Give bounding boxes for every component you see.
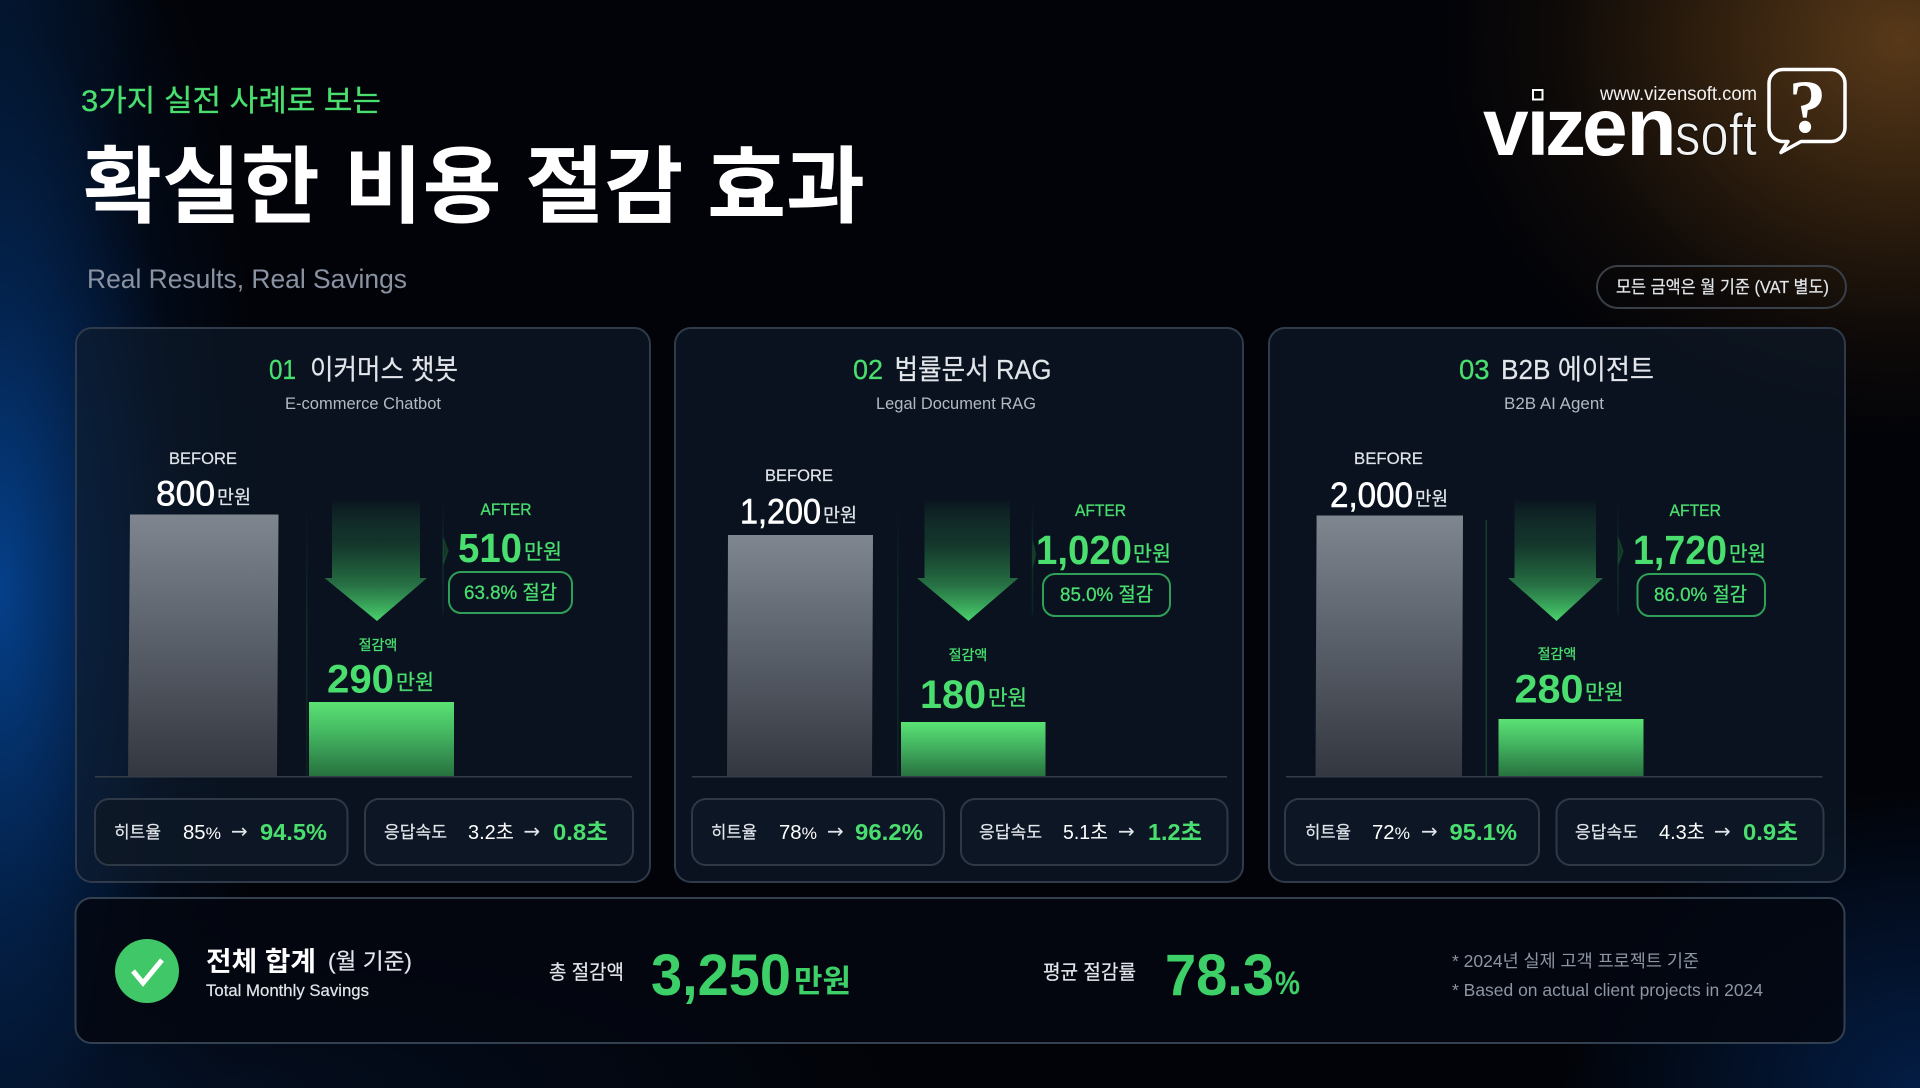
after value 03: 1,720 — [1633, 527, 1727, 573]
logo: vizensoft: www.vizensoft.com — [1599, 83, 1757, 105]
note pill: VAT: 모든 금액은 월 기준 (VAT 별도) — [1616, 277, 1829, 297]
panel: 01 e-commerce chatbot — [76, 328, 650, 882]
savings bar 01: 290 — [327, 658, 394, 702]
before bar 02: 1,200 — [740, 493, 821, 532]
panel 03 heading: B2B AI Agent — [1504, 394, 1604, 413]
panel 01 heading — [269, 354, 458, 413]
average savings rate value: 평균 절감률 — [1043, 961, 1136, 984]
average savings rate value: % — [1275, 965, 1300, 1001]
before bar 03: BEFORE — [1354, 449, 1423, 468]
metric: hit rate 03: 72% — [1372, 822, 1410, 844]
metric: hit rate 01: 94.5% — [260, 819, 327, 845]
before bar 03 — [1316, 449, 1463, 777]
panel 02 heading: 법률문서 RAG — [894, 354, 1052, 385]
savings bar 03: 절감액 — [1538, 646, 1576, 662]
metric: response time 03: → — [1714, 819, 1731, 843]
metric: response time 01: → — [524, 819, 540, 843]
after value 01: 510 — [458, 525, 522, 571]
metric: hit rate 02: 78% — [779, 822, 817, 844]
before bar 02: BEFORE — [765, 466, 833, 485]
after value 02 — [1032, 500, 1171, 616]
total savings value: 3,250 — [651, 943, 791, 1008]
panel 01 heading: 01 — [269, 354, 296, 385]
total savings value: 만원 — [794, 964, 851, 999]
panel: 02 legal document RAG — [675, 328, 1243, 882]
after value 03: AFTER — [1670, 501, 1721, 520]
after value 02: 1,020 — [1036, 527, 1132, 573]
total savings value: 총 절감액 — [549, 961, 624, 984]
before bar 01: 만원 — [217, 486, 251, 508]
after value 02: AFTER — [1075, 501, 1126, 520]
metric: response time 03: 응답속도 — [1575, 823, 1638, 842]
metric: response time 01 — [365, 799, 633, 865]
before bar 03: 2,000 — [1330, 476, 1413, 515]
logo: vizensoft: ? — [1789, 66, 1826, 149]
after value 03: 만원 — [1729, 543, 1766, 566]
metric: hit rate 03: 히트율 — [1305, 823, 1351, 842]
savings bar 03 — [1498, 646, 1644, 777]
footnotes: * 2024년 실제 고객 프로젝트 기준 — [1452, 951, 1699, 971]
average savings rate value: 78.3 — [1165, 943, 1274, 1008]
after value 01: AFTER — [480, 500, 532, 519]
metric: hit rate 02: → — [827, 819, 844, 843]
panel: 03 B2B agent — [1269, 328, 1845, 882]
summary label: Total Monthly Savings — [206, 981, 369, 1000]
metric: hit rate 01: → — [231, 819, 248, 843]
savings bar 03: 만원 — [1585, 682, 1624, 704]
metric: hit rate 02: 히트율 — [711, 823, 757, 842]
total savings value — [549, 943, 851, 1008]
summary label: (월 기준) — [328, 949, 412, 974]
before bar 02 — [727, 466, 873, 777]
note pill: VAT — [1597, 266, 1846, 308]
metric: hit rate 02: 96.2% — [855, 819, 923, 845]
icon: check circle — [115, 939, 179, 1003]
summary label: 전체 합계 — [206, 947, 316, 977]
metric: response time 03: 4.3초 — [1659, 822, 1705, 844]
panel 02 heading: 02 — [853, 354, 883, 385]
savings bar 01: 절감액 — [359, 637, 397, 653]
metric: response time 01: 응답속도 — [384, 823, 447, 842]
logo: vizensoft — [1483, 66, 1845, 173]
savings bar 03: 280 — [1514, 668, 1584, 712]
metric: response time 01: 3.2초 — [468, 822, 514, 844]
metric: hit rate 01 — [95, 799, 348, 865]
before bar 01 — [128, 449, 278, 776]
panel 03 heading: 03 — [1459, 354, 1490, 385]
metric: hit rate 01: 85% — [183, 822, 221, 844]
metric: hit rate 01: 히트율 — [114, 823, 161, 842]
footnotes: * Based on actual client projects in 2024 — [1452, 980, 1763, 1000]
panel: total summary — [76, 898, 1844, 1043]
before bar 01: 800 — [156, 474, 215, 514]
after value 03: 86.0% 절감 — [1654, 584, 1747, 606]
metric: response time 02: 응답속도 — [979, 823, 1042, 842]
metric: response time 02: 1.2초 — [1148, 819, 1202, 845]
panel 03 heading — [1459, 354, 1654, 413]
metric: response time 03: 0.9초 — [1743, 819, 1798, 845]
before bar 03: 만원 — [1415, 488, 1448, 510]
metric: response time 03 — [1556, 799, 1824, 865]
summary label — [206, 947, 412, 1000]
metric: hit rate 03: → — [1421, 819, 1438, 843]
arrow 01 — [324, 498, 427, 621]
after value 01: 63.8% 절감 — [464, 582, 557, 604]
metric: response time 01: 0.8초 — [553, 819, 608, 845]
after value 03 — [1618, 500, 1766, 616]
savings bar 02 — [901, 647, 1046, 777]
savings bar 01 — [309, 637, 454, 777]
after value 01: 만원 — [524, 541, 562, 564]
logo: vizensoft: soft — [1675, 102, 1757, 168]
before bar 02: 만원 — [823, 505, 857, 527]
panel 02 heading: Legal Document RAG — [876, 394, 1036, 413]
panel 01 heading: 이커머스 챗봇 — [310, 354, 458, 385]
metric: response time 02: → — [1118, 819, 1135, 843]
panel 03 heading: B2B 에이전트 — [1501, 354, 1654, 385]
subtitle: 3가지 실전 사례로 보는 — [81, 85, 381, 118]
arrow 03 — [1508, 498, 1603, 621]
average savings rate value — [1043, 943, 1300, 1008]
panel 01 heading: E-commerce Chatbot — [285, 394, 441, 413]
savings bar 01: 만원 — [396, 672, 434, 695]
metric: response time 02: 5.1초 — [1063, 822, 1108, 844]
metric: hit rate 03 — [1285, 799, 1539, 865]
panel 02 heading — [853, 354, 1052, 413]
savings bar 02: 만원 — [988, 687, 1027, 710]
savings bar 02: 절감액 — [949, 647, 987, 663]
english subtitle: Real Results, Real Savings — [87, 264, 407, 294]
after value 01 — [443, 500, 572, 615]
after value 02: 만원 — [1133, 543, 1171, 566]
arrow 02 — [917, 498, 1018, 621]
title: 확실한 비용 절감 효과 — [83, 140, 865, 234]
savings bar 02: 180 — [920, 673, 986, 717]
after value 02: 85.0% 절감 — [1060, 584, 1153, 606]
before bar 01: BEFORE — [169, 449, 237, 468]
footnotes — [1452, 951, 1763, 1000]
metric: hit rate 03: 95.1% — [1450, 819, 1517, 845]
logo: vizensoft: vizen — [1483, 82, 1677, 173]
metric: response time 02 — [961, 799, 1228, 865]
metric: hit rate 02 — [692, 799, 944, 865]
